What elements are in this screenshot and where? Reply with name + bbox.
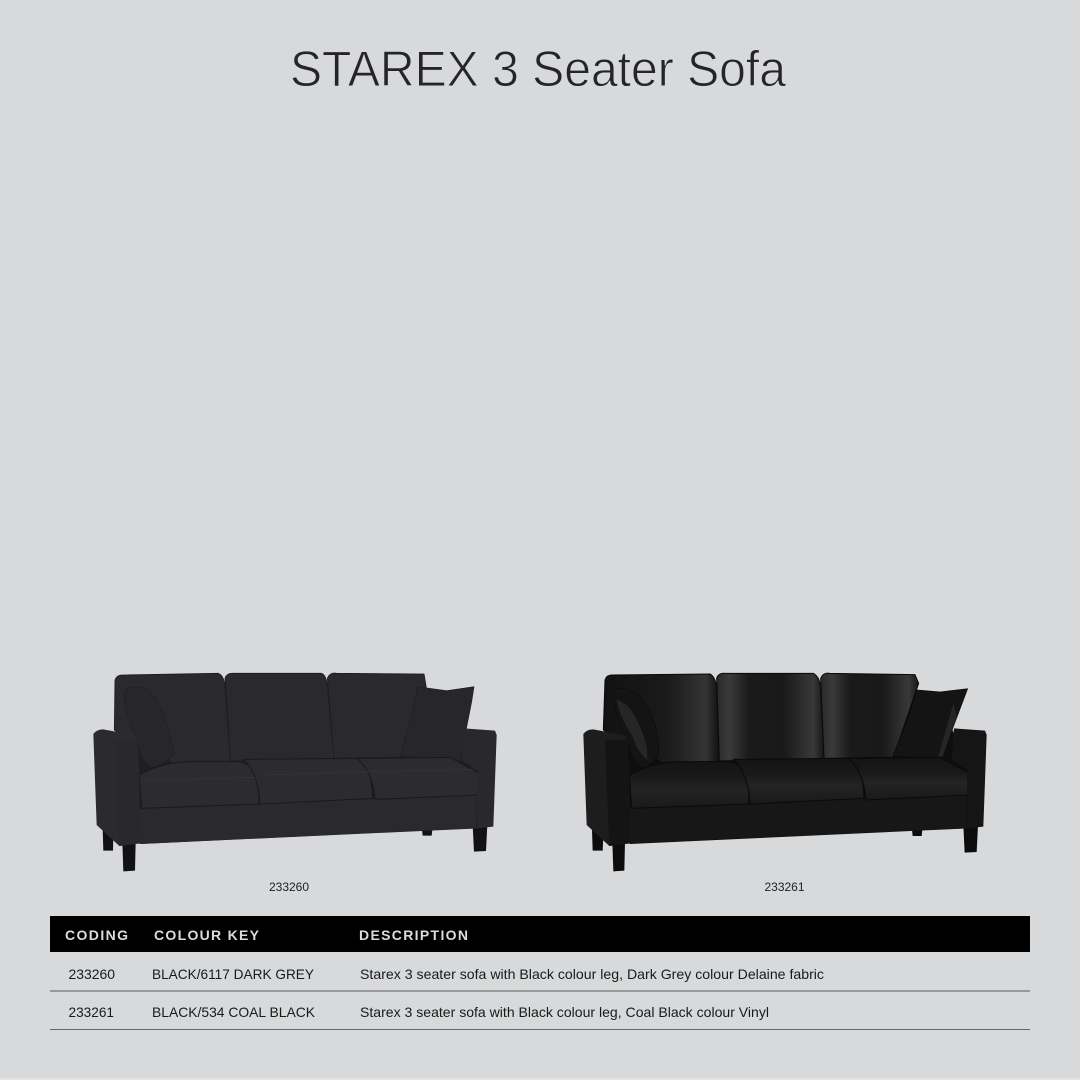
- seat cushions: [629, 757, 970, 808]
- sofa legs: [592, 825, 978, 871]
- sofa body underlay: [117, 693, 478, 844]
- table row: 233260: Starex 3 seater sofa with Black colour leg, Dark Grey colour Delaine fabric: [360, 966, 824, 982]
- table row: 233260: [50, 966, 1030, 992]
- base rail: [140, 795, 477, 844]
- throw pillows: [124, 687, 474, 768]
- table row: 233260: 233260: [68, 966, 115, 982]
- product image: coal black vinyl sofa: [583, 673, 987, 871]
- caption: 233261: 233261: [764, 880, 805, 894]
- back cushions: [114, 673, 427, 763]
- table row: 233261: [50, 1004, 1030, 1030]
- table: [50, 916, 1030, 1030]
- arm rests: [462, 728, 497, 828]
- caption: 233260: 233260: [269, 880, 309, 894]
- table row: 233261: BLACK/534 COAL BLACK: [152, 1004, 316, 1020]
- table header: DESCRIPTION: [359, 927, 468, 943]
- table row: 233260: BLACK/6117 DARK GREY: [152, 966, 315, 982]
- table row: 233261: Starex 3 seater sofa with Black colour leg, Coal Black colour Vinyl: [360, 1004, 769, 1020]
- back cushions: [603, 673, 919, 763]
- base rail: [630, 795, 967, 843]
- sofa body underlay: [605, 693, 968, 844]
- table header: [50, 916, 1030, 952]
- throw pillows: [614, 688, 968, 768]
- table header: CODING: [65, 927, 128, 943]
- table row: 233261: 233261: [68, 1004, 114, 1020]
- arm rests: [952, 728, 987, 828]
- seat piping: [142, 769, 477, 781]
- product image: dark grey fabric sofa: [93, 673, 497, 871]
- title: STAREX 3 Seater Sofa: [290, 41, 786, 97]
- pillow sheen: [617, 700, 957, 760]
- table header: COLOUR KEY: [154, 927, 260, 943]
- seat cushions: [139, 757, 479, 808]
- sofa legs: [103, 825, 487, 871]
